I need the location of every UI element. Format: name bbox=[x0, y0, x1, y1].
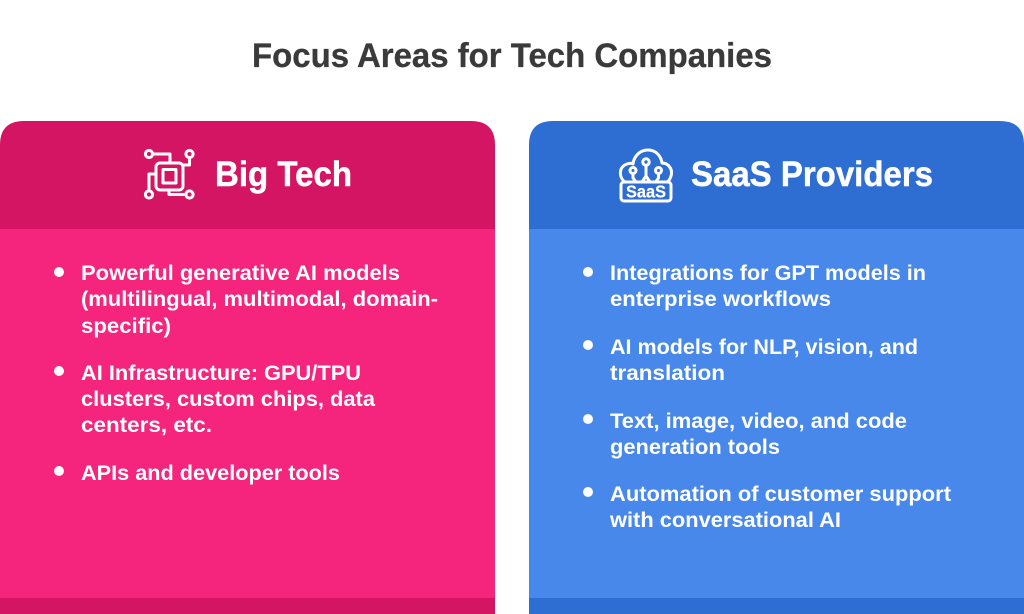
bullet 4: Automation of customer support bbox=[610, 482, 951, 506]
bullet 2 bbox=[583, 335, 918, 385]
header band: Big Tech bbox=[0, 121, 495, 229]
bullet 4: with conversational AI bbox=[609, 508, 841, 532]
bullet 1 bbox=[54, 261, 438, 338]
bullet 3: Text, image, video, and code bbox=[610, 409, 907, 433]
bullet 1: specific) bbox=[81, 314, 171, 338]
bullet 1: Powerful generative AI models bbox=[81, 261, 400, 285]
bullet 4 bbox=[583, 482, 951, 532]
bullet 2: clusters, custom chips, data bbox=[81, 387, 376, 411]
panel body: Big Tech bbox=[0, 229, 495, 614]
header band: SaaS Providers bbox=[529, 121, 1024, 229]
heading: Big Tech: Big Tech bbox=[215, 155, 352, 194]
bullet 2 bbox=[54, 361, 376, 437]
bullet 2: AI Infrastructure: GPU/TPU bbox=[81, 361, 361, 385]
panel: SaaS Providers bbox=[529, 121, 1024, 614]
bullet 3: APIs and developer tools bbox=[81, 461, 340, 485]
bullet 2: centers, etc. bbox=[81, 413, 212, 437]
icon: circuit chip bbox=[145, 150, 193, 198]
bullet 3 bbox=[583, 409, 907, 459]
title: Focus Areas for Tech Companies bbox=[252, 37, 772, 75]
footer band: Big Tech bbox=[0, 598, 495, 614]
heading: SaaS Providers: SaaS Providers bbox=[691, 155, 933, 194]
bullet 2: AI models for NLP, vision, and bbox=[610, 335, 918, 359]
bullet list: SaaS Providers bbox=[583, 261, 951, 532]
bullet 3: generation tools bbox=[610, 435, 780, 459]
bullet list: Big Tech bbox=[54, 261, 438, 485]
footer band: SaaS Providers bbox=[529, 598, 1024, 614]
panel: Big Tech bbox=[0, 121, 495, 614]
panel body: SaaS Providers bbox=[529, 229, 1024, 614]
bullet 1: enterprise workflows bbox=[610, 287, 831, 311]
icon: SaaS cloud: SaaS bbox=[626, 182, 666, 202]
bullet 2: translation bbox=[610, 361, 725, 385]
bullet 1 bbox=[583, 261, 926, 311]
icon: SaaS cloud bbox=[620, 150, 672, 202]
bullet 1: (multilingual, multimodal, domain- bbox=[81, 287, 438, 311]
bullet 1: Integrations for GPT models in bbox=[610, 261, 926, 285]
